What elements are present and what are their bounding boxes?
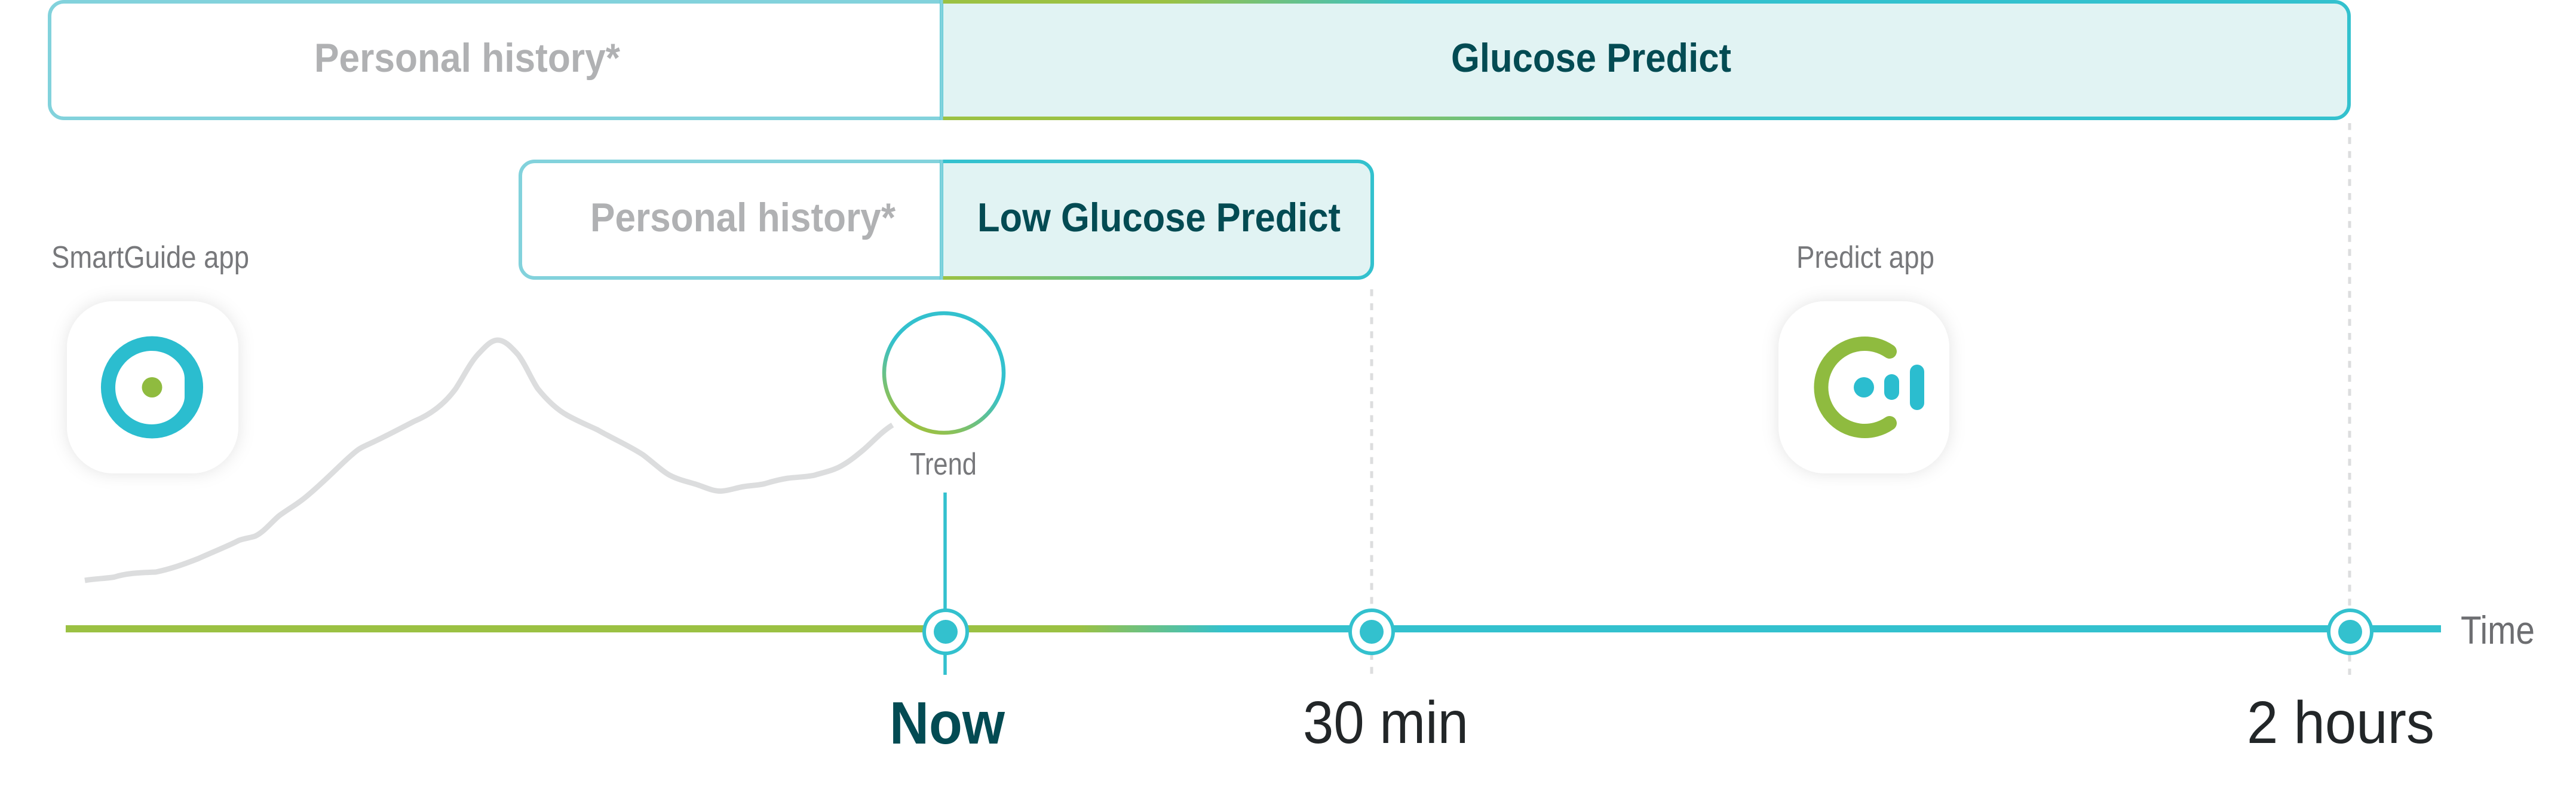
dashed guide: 2 hours bbox=[2348, 123, 2351, 675]
marker: 2 hours bbox=[2329, 610, 2372, 653]
segment: personal history bbox=[50, 2, 942, 118]
label: Trend: Trend bbox=[910, 447, 977, 482]
segment: low glucose predict: Low Glucose Predict bbox=[977, 195, 1341, 240]
label: 2 hours: 2 hours bbox=[2247, 689, 2434, 756]
label: Now: Now bbox=[890, 690, 1005, 757]
icon: SmartGuide app bbox=[67, 301, 238, 473]
connector: trend to now bbox=[943, 493, 947, 675]
segment: glucose predict: Glucose Predict bbox=[1451, 35, 1731, 81]
label: Time: Time bbox=[2461, 608, 2535, 652]
label: SmartGuide app: SmartGuide app bbox=[51, 240, 249, 275]
panel: top bar bbox=[50, 0, 2349, 120]
segment: personal history: Personal history* bbox=[314, 35, 620, 81]
marker: now bbox=[924, 610, 967, 653]
segment: personal history short: Personal history* bbox=[590, 195, 896, 240]
icon: Predict app bbox=[1778, 301, 1949, 473]
dashed guide: 30 min bbox=[1370, 289, 1373, 675]
panel: second bar bbox=[520, 160, 1372, 280]
segment: glucose predict bbox=[942, 0, 2349, 120]
icon: trend circle bbox=[884, 313, 1004, 433]
time axis bbox=[66, 625, 2441, 632]
label: 30 min: 30 min bbox=[1303, 689, 1468, 756]
marker: 30 min bbox=[1350, 610, 1393, 653]
segment: low glucose predict bbox=[942, 160, 1372, 280]
chart: glucose history curve bbox=[85, 340, 893, 580]
segment: personal history short bbox=[520, 161, 942, 278]
label: Predict app: Predict app bbox=[1796, 240, 1934, 275]
